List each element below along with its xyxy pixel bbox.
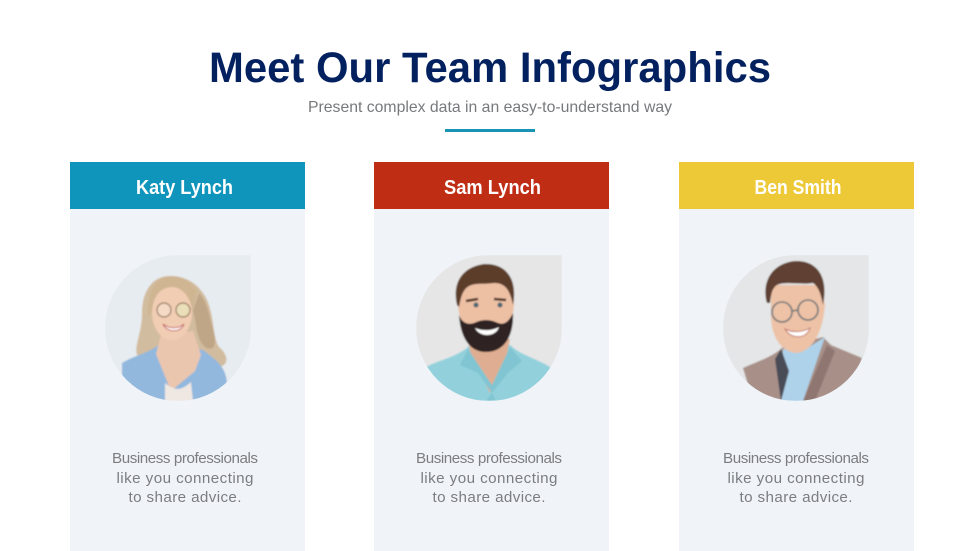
panel background (70, 162, 305, 551)
name: Ben Smith (754, 177, 842, 199)
panel background (679, 162, 914, 551)
header bar (679, 162, 914, 209)
portrait: Sam (416, 255, 562, 401)
panel: Ben Smith (679, 162, 914, 551)
title: Meet Our Team Infographics (209, 44, 771, 92)
title underline (445, 129, 535, 132)
description (723, 450, 869, 506)
description: like you connecting (420, 470, 558, 487)
subtitle: Present complex data in an easy-to-understand way (308, 99, 672, 116)
description: to share advice. (432, 489, 546, 506)
name: Sam Lynch (444, 177, 541, 199)
header bar (70, 162, 305, 209)
description: Business professionals (723, 450, 869, 467)
panel: Sam Lynch (374, 162, 609, 551)
panel background (374, 162, 609, 551)
description: Business professionals (112, 450, 258, 467)
portrait: Katy (105, 255, 251, 401)
description: to share advice. (740, 489, 852, 506)
description: Business professionals (416, 450, 562, 467)
panel: Katy Lynch (70, 162, 305, 551)
header bar (374, 162, 609, 209)
description: to share advice. (128, 489, 242, 506)
name: Katy Lynch (136, 177, 233, 199)
description: like you connecting (728, 470, 864, 487)
portrait: Ben (723, 255, 869, 401)
description (112, 450, 258, 506)
description: like you connecting (116, 470, 254, 487)
description (416, 450, 562, 506)
